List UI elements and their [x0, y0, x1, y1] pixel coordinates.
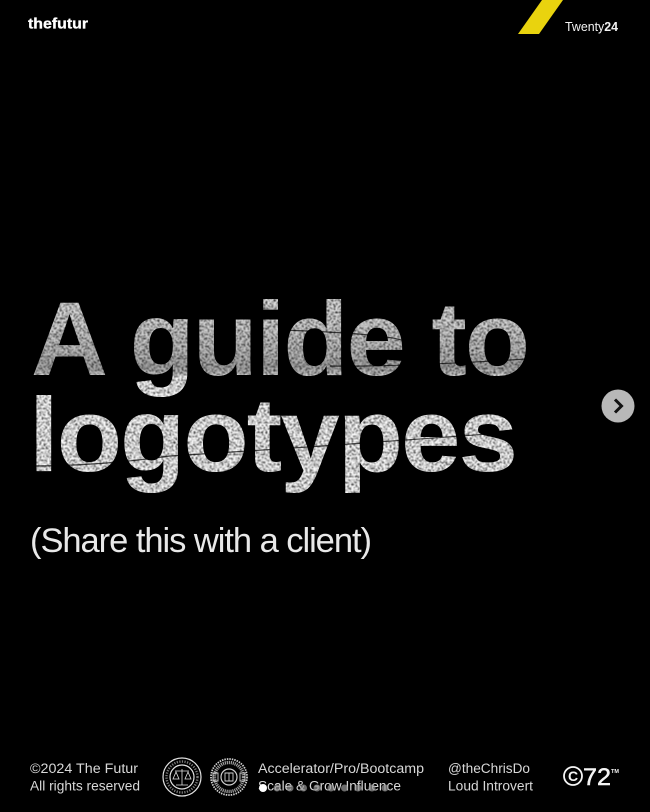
next arrow button: [602, 390, 634, 422]
copyright text: [30, 761, 140, 794]
badge: The Futur Academy: [163, 758, 201, 796]
title: A guide to: [31, 281, 528, 398]
programs text: Accelerator/Pro/Bootcamp: [258, 761, 424, 776]
programs text: Scale & Grow Influence: [258, 778, 401, 794]
title: logotypes: [29, 377, 516, 494]
handle text: Loud Introvert: [448, 778, 533, 794]
logo: C72: [564, 764, 619, 791]
title: [29, 281, 528, 494]
handle text: @theChrisDo: [448, 761, 530, 776]
logo: C72: 72: [583, 764, 611, 791]
brand: Twenty24: Twenty24: [565, 19, 619, 34]
icon: yellow slash: [518, 0, 563, 34]
logo: C72: C: [568, 768, 578, 784]
carousel pagination dots: [259, 784, 388, 792]
badge: The Futur Pro: [211, 759, 247, 795]
programs text: [258, 761, 424, 794]
handle text: [448, 761, 533, 794]
logo: C72: TM: [611, 769, 619, 775]
logo: thefutur: thefutur: [28, 16, 88, 32]
subtitle: (Share this with a client): [30, 522, 372, 560]
copyright text: ©2024 The Futur: [30, 761, 139, 776]
copyright text: All rights reserved: [30, 778, 140, 794]
